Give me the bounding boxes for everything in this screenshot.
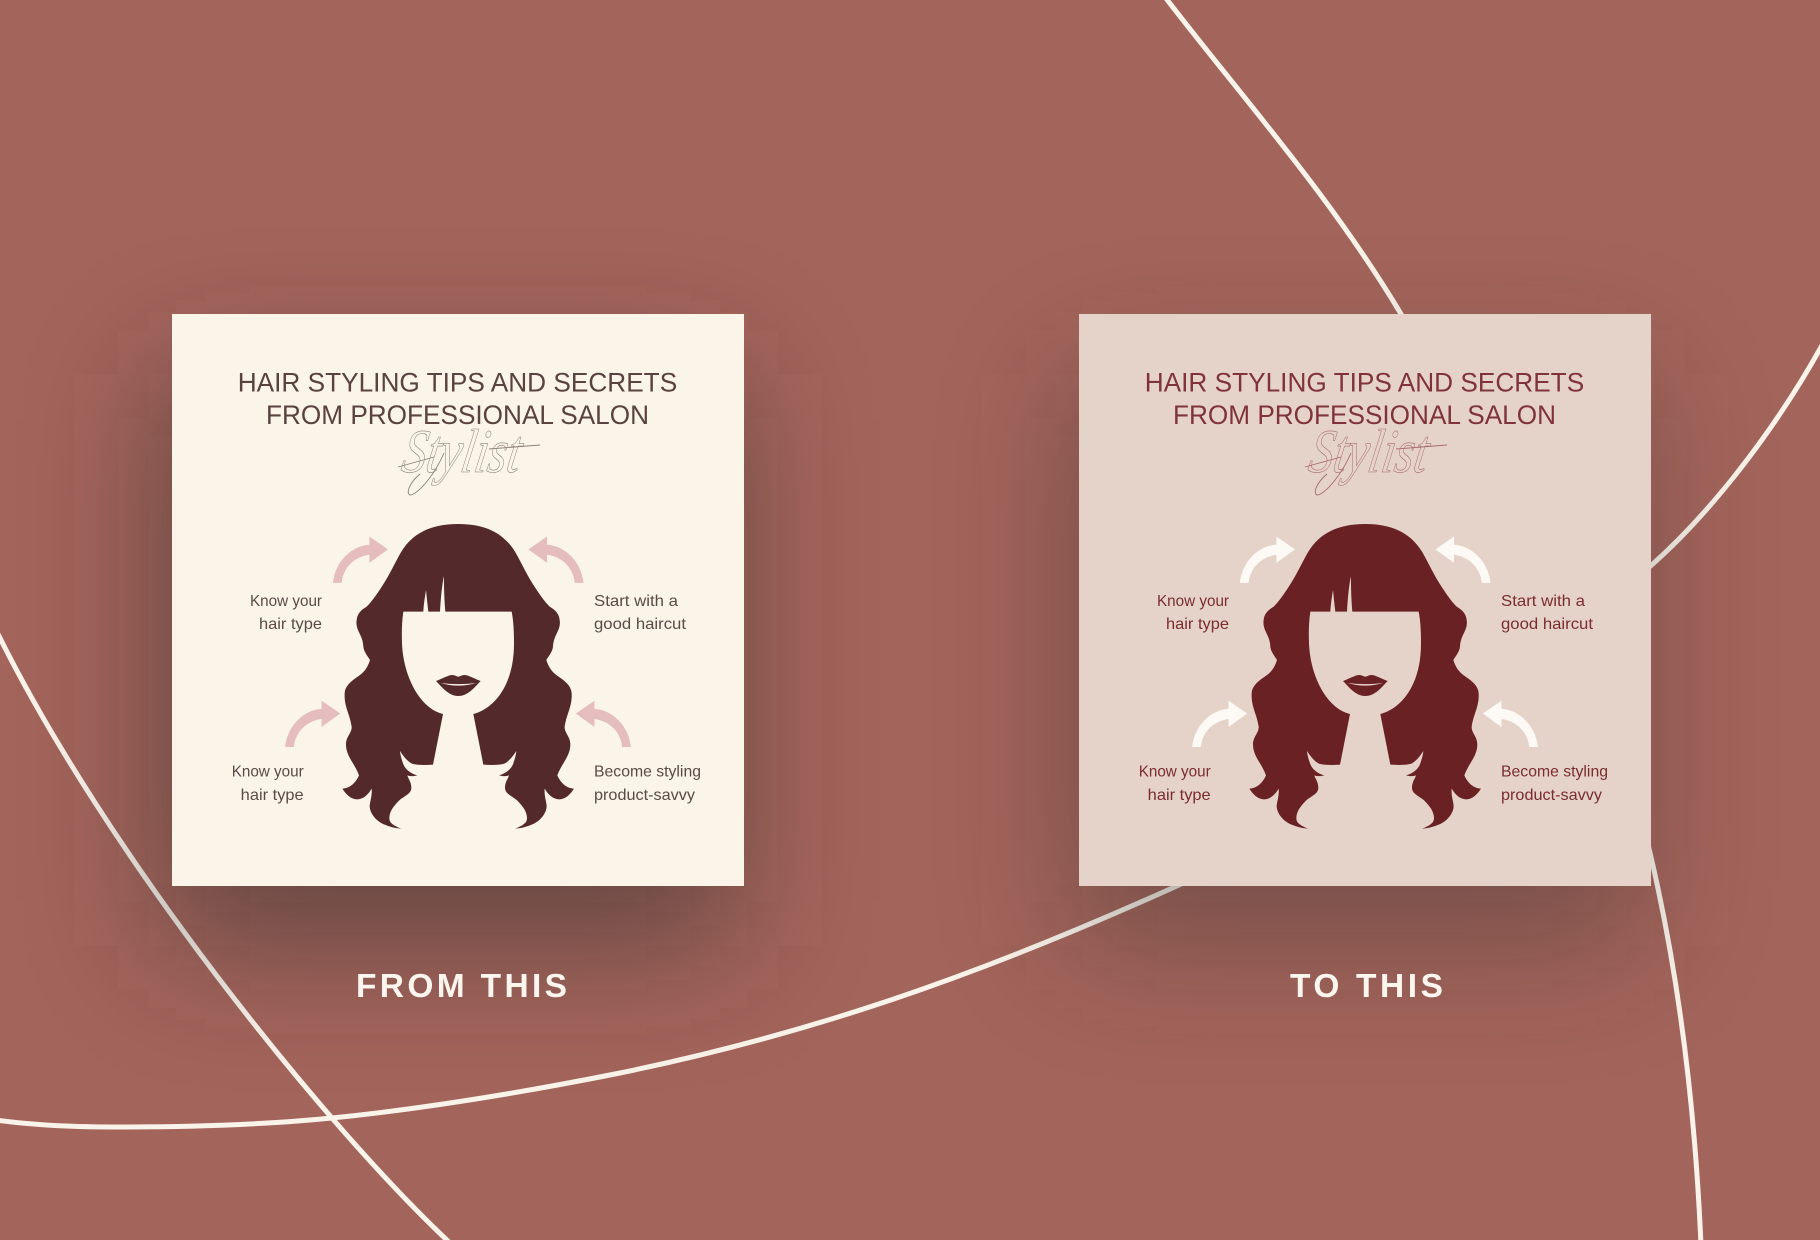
heading: card title: HAIR STYLING TIPS AND SECRETS (1145, 367, 1584, 397)
caption: from this: FROM THIS (356, 968, 567, 1005)
tip labels (232, 593, 701, 804)
tip labels: hair type (1148, 787, 1211, 804)
script word: Stylist: Stylist (398, 416, 529, 486)
heading: card title: FROM PROFESSIONAL SALON (266, 400, 649, 430)
tip labels: Know your (1139, 764, 1211, 781)
heading: card title: HAIR STYLING TIPS AND SECRETS (238, 367, 677, 397)
tip labels: Know your (232, 764, 304, 781)
tip labels: hair type (259, 616, 322, 633)
tip labels: product-savvy (1501, 787, 1602, 804)
tip labels: good haircut (1501, 616, 1594, 633)
panel: to this card (1079, 314, 1651, 886)
script word: Stylist: Stylist (1305, 416, 1436, 486)
tip labels: Start with a (594, 593, 678, 610)
tip labels: hair type (241, 787, 304, 804)
arrows: four curved arrows (285, 537, 631, 747)
tip labels: good haircut (594, 616, 687, 633)
caption: to this: TO THIS (1290, 968, 1443, 1005)
tip labels: Know your (250, 593, 323, 610)
heading: card title: FROM PROFESSIONAL SALON (1173, 400, 1556, 430)
tip labels (1139, 593, 1608, 804)
tip labels: Start with a (1501, 593, 1585, 610)
arrows: four curved arrows (1192, 537, 1538, 747)
heading: card title (1145, 367, 1584, 430)
tip labels: product-savvy (594, 787, 695, 804)
tip labels: Become styling (1501, 764, 1608, 781)
tip labels: Become styling (594, 764, 701, 781)
panel: from this card (172, 314, 744, 886)
heading: card title (238, 367, 677, 430)
illustration: hair silhouette (1249, 524, 1481, 829)
illustration: hair silhouette (342, 524, 574, 829)
tip labels: Know your (1157, 593, 1230, 610)
tip labels: hair type (1166, 616, 1229, 633)
